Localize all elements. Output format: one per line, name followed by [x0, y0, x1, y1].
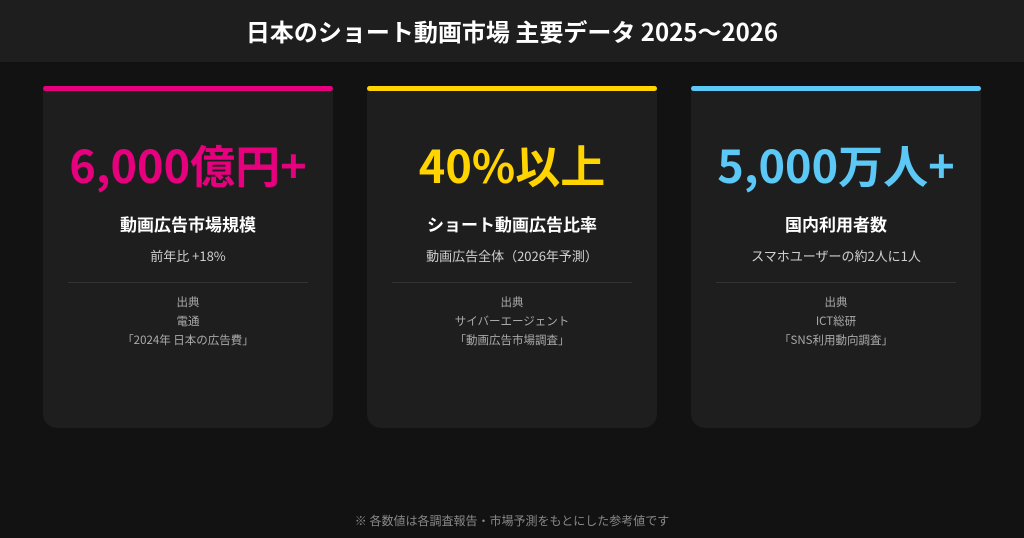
title [0, 0, 1024, 62]
source: サイバーエージェント [455, 313, 569, 329]
source: 出典 [176, 294, 200, 310]
footer note: ※ 各数値は各調査報告・市場予測をもとにした参考値です [355, 512, 669, 529]
panel: ad market [43, 86, 333, 428]
source: 電通 [176, 313, 200, 329]
headline number: 5,000万人+ [717, 131, 955, 196]
source: 出典 [500, 294, 524, 310]
label: 国内利用者数 [785, 211, 887, 236]
source: 「動画広告市場調査」 [454, 332, 570, 348]
headline number: 40%以上 [419, 131, 605, 196]
sub text: 動画広告全体（2026年予測） [426, 246, 598, 265]
headline number: 6,000億円+ [69, 131, 307, 196]
source [454, 294, 570, 348]
source [779, 294, 893, 348]
label: 動画広告市場規模 [120, 211, 256, 236]
panel: share [367, 86, 657, 428]
source: 出典 [824, 294, 848, 310]
label: ショート動画広告比率 [427, 211, 597, 236]
source: ICT総研 [816, 313, 856, 329]
source: 「SNS利用動向調査」 [779, 332, 893, 348]
source: 「2024年 日本の広告費」 [122, 332, 254, 348]
sub text: 前年比 +18% [150, 246, 226, 265]
panel: users [691, 86, 981, 428]
title: 日本のショート動画市場 主要データ 2025〜2026 [246, 13, 778, 48]
sub text: スマホユーザーの約2人に1人 [751, 246, 921, 265]
source [122, 294, 254, 348]
